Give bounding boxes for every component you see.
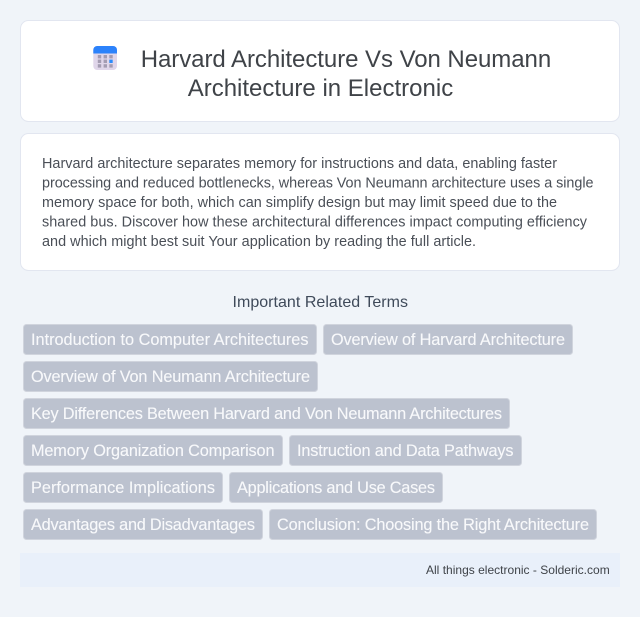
text block: summary: shared bus. Discover how these architectural differences impact computing efficiency [42, 214, 588, 230]
tag: overview of harvard: Overview of Harvard Architecture [331, 331, 565, 349]
tag: applications and use cases [230, 472, 442, 502]
tag: performance implications: Performance Implications [31, 479, 215, 497]
tag: key differences [24, 398, 510, 428]
text block: summary: memory space for both, which can simplify design but may limit speed due to the [42, 195, 557, 211]
tag: conclusion: Conclusion: Choosing the Right Architecture [277, 516, 589, 534]
text block: summary: Harvard architecture separates memory for instructions and data, enabling faster [42, 156, 557, 172]
title [141, 46, 551, 102]
tag: advantages and disadvantages: Advantages and Disadvantages [31, 516, 255, 534]
heading: important related terms: Important Related Terms [232, 294, 408, 311]
footer [20, 553, 620, 587]
tag: advantages and disadvantages [24, 510, 262, 540]
tag: memory organization: Memory Organization Comparison [31, 442, 274, 460]
title: Harvard Architecture Vs Von Neumann [141, 46, 551, 73]
text block: summary: and which might best suit Your application by reading the full article. [42, 234, 476, 250]
tag: conclusion [270, 510, 596, 540]
panel: title header [20, 20, 620, 122]
tag: introduction [24, 324, 316, 354]
tag: instruction and data pathways [290, 436, 522, 466]
tag: introduction: Introduction to Computer Architectures [31, 331, 308, 349]
footer: All things electronic - Solderic.com [426, 563, 610, 577]
tag: overview of von neumann: Overview of Von Neumann Architecture [31, 368, 310, 386]
tag: memory organization [24, 436, 282, 466]
text block: summary: processing and reduced bottlenecks, whereas Von Neumann architecture uses a single [42, 176, 594, 192]
icon: calendar grid [93, 46, 117, 70]
tag: overview of von neumann [24, 362, 318, 392]
text block: summary [42, 156, 594, 250]
tag: performance implications [24, 472, 222, 502]
tag: applications and use cases: Applications and Use Cases [237, 479, 435, 497]
tag: key differences: Key Differences Between Harvard and Von Neumann Architectures [31, 405, 502, 423]
panel: summary paragraph [20, 134, 620, 270]
tag: instruction and data pathways: Instruction and Data Pathways [297, 442, 514, 460]
tag: overview of harvard [324, 324, 572, 354]
title: Architecture in Electronic [188, 75, 453, 102]
